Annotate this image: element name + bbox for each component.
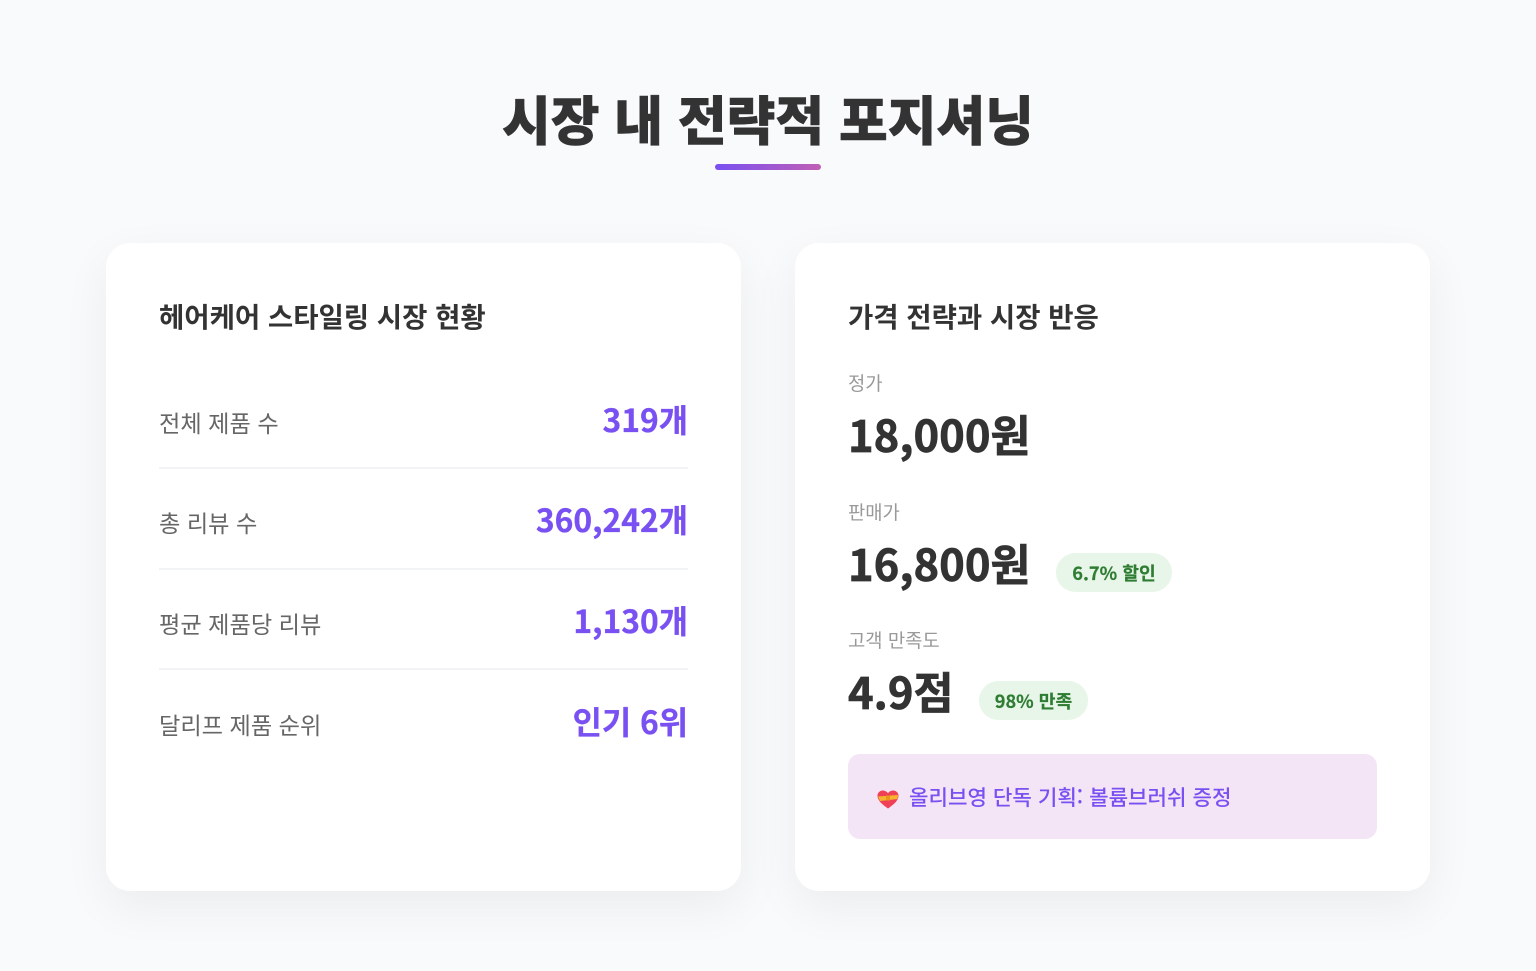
value: product rank: 인기 6위 — [573, 698, 688, 744]
label: list price: 정가 — [848, 369, 883, 396]
label: sale price: 판매가 — [848, 498, 900, 525]
value: satisfaction: 4.9점 — [848, 659, 954, 722]
value: sale price: 16,800원 — [848, 531, 1031, 594]
callout: exclusive offer — [848, 754, 1377, 839]
badge: discount — [1056, 553, 1172, 592]
label: satisfaction: 고객 만족도 — [848, 626, 940, 653]
badge: satisfaction: 98% 만족 — [995, 688, 1072, 714]
label: average reviews: 평균 제품당 리뷰 — [159, 606, 321, 640]
badge: satisfaction — [979, 681, 1088, 720]
label: product rank: 달리프 제품 순위 — [159, 707, 321, 741]
value: list price: 18,000원 — [848, 402, 1031, 465]
title: 시장 내 전략적 포지셔닝 — [502, 80, 1034, 156]
heading: pricing: 가격 전략과 시장 반응 — [848, 295, 1099, 335]
value: total reviews: 360,242개 — [536, 496, 688, 542]
value: average reviews: 1,130개 — [573, 597, 688, 643]
panel: market status — [106, 243, 741, 891]
value: total products: 319개 — [602, 396, 688, 442]
badge: discount: 6.7% 할인 — [1072, 560, 1156, 586]
label: total products: 전체 제품 수 — [159, 405, 279, 439]
icon: gift heart — [878, 790, 898, 808]
heading: market status: 헤어케어 스타일링 시장 현황 — [159, 295, 486, 335]
callout text: 올리브영 단독 기획: 볼륨브러쉬 증정 — [909, 781, 1231, 812]
panel: pricing — [795, 243, 1430, 891]
title underline — [715, 164, 821, 170]
label: total reviews: 총 리뷰 수 — [159, 505, 257, 539]
